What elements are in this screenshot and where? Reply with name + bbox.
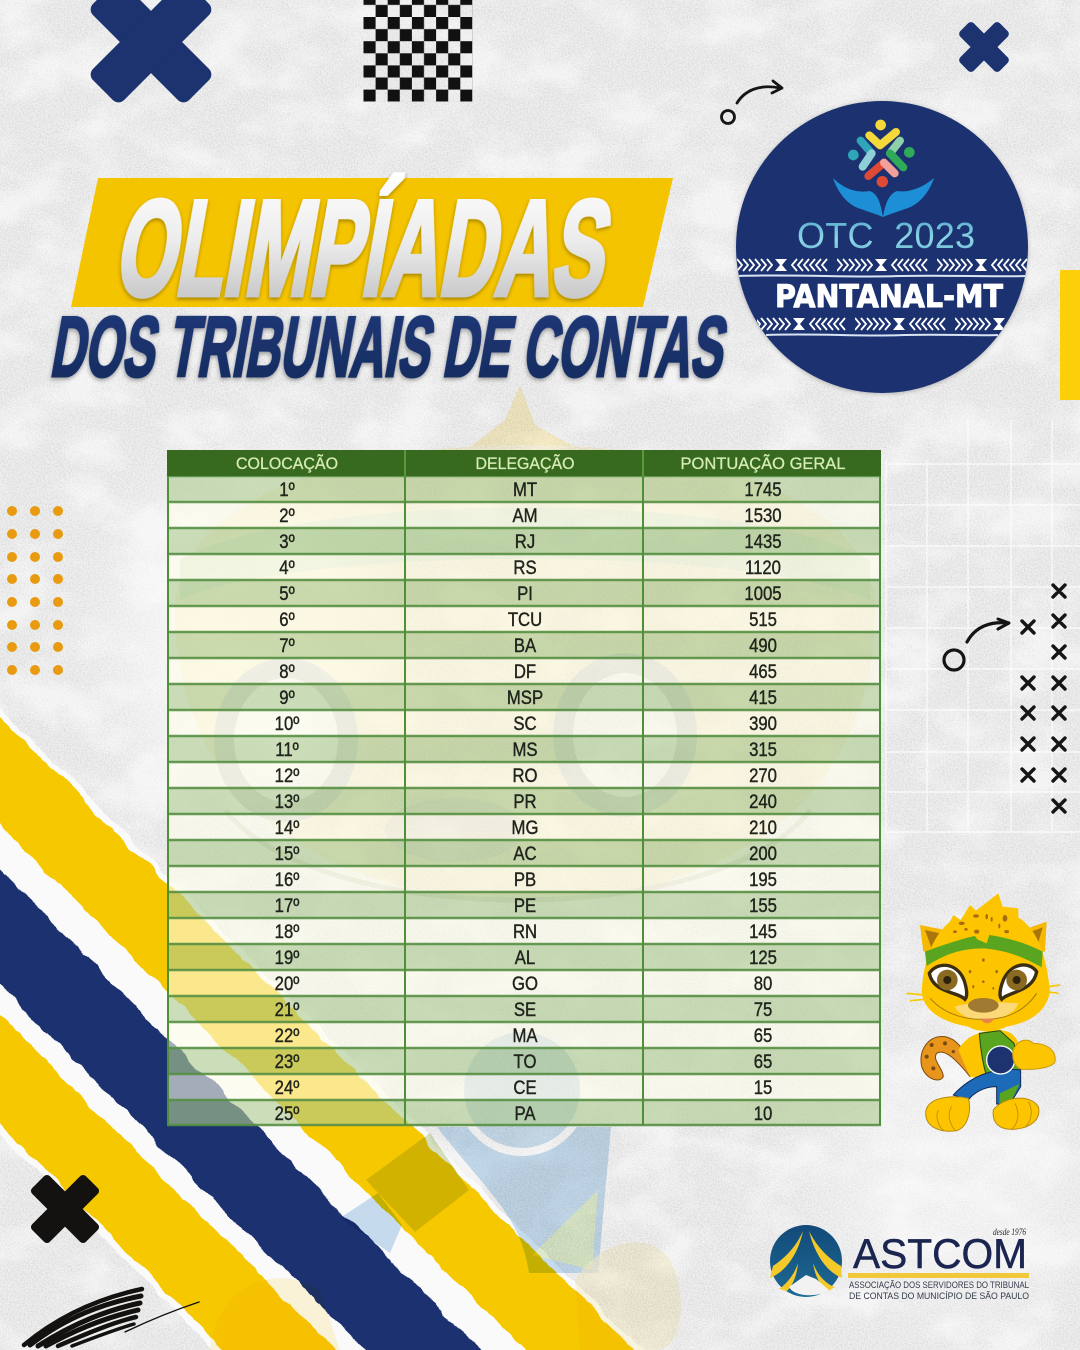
column: pontuação geral: 195 [749,869,777,890]
table header: PONTUAÇÃO GERAL [680,454,846,473]
column: colocação: 14º [275,817,300,838]
column: delegação: MSP [507,687,543,708]
column: pontuação geral: 145 [749,921,777,942]
icon: blue hands [833,178,934,217]
ears [920,922,1047,952]
column: pontuação geral: 240 [749,791,777,812]
column: delegação: BA [514,635,536,656]
column: pontuação geral: 1120 [745,557,781,578]
column: colocação: 24º [275,1077,300,1098]
fist [1013,1040,1055,1069]
column: delegação: RO [512,765,538,786]
column: delegação: TO [514,1051,537,1072]
column: delegação: PB [514,869,536,890]
icon: otc colourful people logo [848,120,915,187]
column: delegação: SE [514,999,536,1020]
title banner [71,178,673,307]
column: delegação: CE [513,1077,537,1098]
astcom full name: DE CONTAS DO MUNICÍPIO DE SÃO PAULO [849,1291,1029,1302]
table header [167,450,881,476]
column: pontuação geral: 15 [754,1077,772,1098]
column: colocação: 13º [275,791,300,812]
column: pontuação geral: 200 [749,843,777,864]
column: pontuação geral: 210 [749,817,777,838]
head spots [953,914,1009,990]
column: pontuação geral: 155 [749,895,777,916]
icon: black cross [11,1155,119,1263]
column: colocação: 11º [275,739,299,760]
column: delegação: SC [513,713,537,734]
column: delegação: RS [513,557,537,578]
astcom full name: ASSOCIAÇÃO DOS SERVIDORES DO TRIBUNAL [849,1280,1029,1291]
icon: orange dot grid [7,506,63,675]
column: colocação: 16º [275,869,300,890]
results table [167,450,881,1125]
pantanal-mt text: PANTANAL-MT [775,279,1003,315]
column: colocação: 18º [275,921,300,942]
torn paper stripes [0,688,652,1350]
column: delegação: MG [512,817,538,838]
column: delegação: DF [514,661,536,682]
column: pontuação geral [744,479,782,1124]
column: delegação: PA [514,1103,536,1124]
column: colocação: 23º [275,1051,300,1072]
muzzle [955,1002,1018,1020]
column: colocação: 22º [275,1025,300,1046]
column: colocação: 5º [279,583,295,604]
column: pontuação geral: 80 [754,973,772,994]
column: delegação: PR [513,791,537,812]
column: delegação: TCU [508,609,542,630]
icon: small navy cross [944,7,1024,87]
desde 1976: desde 1976 [993,1227,1026,1237]
headband [925,935,1043,967]
column: pontuação geral: 465 [749,661,777,682]
faded mascot watermark: body [210,1028,681,1350]
body and shirt [958,1030,1022,1080]
logo: astcom [770,1225,1029,1302]
feet [926,1097,1039,1131]
astcom yellow rule [848,1273,1029,1278]
column: delegação: PI [517,583,533,604]
column: pontuação geral: 1005 [744,583,782,604]
column: pontuação geral: 65 [754,1051,772,1072]
table header: DELEGAÇÃO [476,454,574,473]
head [922,893,1050,1031]
column: colocação: 25º [275,1103,300,1124]
column: pontuação geral: 1530 [744,505,782,526]
shorts [953,1069,1021,1104]
column: colocação: 3º [279,531,295,552]
column: delegação [507,479,543,1124]
column: pontuação geral: 75 [754,999,772,1020]
column: pontuação geral: 10 [754,1103,772,1124]
column: colocação: 9º [279,687,295,708]
column: delegação: GO [512,973,538,994]
astcom full name [849,1280,1029,1302]
column: delegação: PE [514,895,536,916]
tail [921,1037,975,1080]
nose [968,998,999,1013]
column: delegação: AL [515,947,535,968]
column: colocação: 8º [279,661,295,682]
mascot: jaguar [907,893,1060,1131]
badge on shirt [987,1046,1015,1074]
icon: tactical play diagram [944,585,1065,812]
column: pontuação geral: 1745 [744,479,782,500]
column: pontuação geral: 65 [754,1025,772,1046]
decorative tribal bands [730,258,1040,336]
column: pontuação geral: 270 [749,765,777,786]
column: colocação: 17º [275,895,300,916]
icon: large navy cross [55,0,247,138]
column: delegação: MS [512,739,538,760]
column: pontuação geral: 490 [749,635,777,656]
column: colocação: 21º [275,999,300,1020]
column: colocação: 7º [279,635,295,656]
faded mascot watermark: head [175,385,875,900]
column: pontuação geral: 515 [749,609,777,630]
column: delegação: RJ [515,531,535,552]
otc 2023 text: OTC 2023 [797,215,975,256]
column: pontuação geral: 125 [749,947,777,968]
column: colocação: 15º [275,843,300,864]
column: colocação: 1º [279,479,295,500]
whiskers [907,985,1060,1001]
eye left [929,965,967,999]
checkerboard pattern [364,0,472,102]
table header: COLOCAÇÃO [236,454,338,473]
column: colocação: 2º [279,505,295,526]
title: olimpíadas: OLIMPÍADAS [108,173,623,325]
table row backgrounds [167,476,881,1125]
column: pontuação geral: 390 [749,713,777,734]
column: colocação: 12º [275,765,300,786]
column: pontuação geral: 1435 [744,531,782,552]
column: delegação: MA [512,1025,538,1046]
tongue [981,1019,993,1023]
eye right [1000,965,1037,999]
yellow side tab [1060,270,1080,400]
column: colocação [275,479,300,1124]
column: colocação: 10º [275,713,300,734]
column: delegação: RN [513,921,537,942]
brush scribble [24,1289,199,1346]
column: pontuação geral: 415 [749,687,777,708]
column: colocação: 19º [275,947,300,968]
column: colocação: 20º [275,973,300,994]
badge: otc 2023 pantanal [730,101,1040,393]
astcom emblem [770,1225,842,1297]
column: colocação: 6º [279,609,295,630]
column: pontuação geral: 315 [749,739,777,760]
icon: curved arrow top [722,81,782,124]
column: colocação: 4º [279,557,295,578]
column: delegação: AM [512,505,538,526]
astcom wordmark: ASTCOM [853,1230,1027,1277]
column: delegação: MT [513,479,537,500]
column: delegação: AC [513,843,537,864]
